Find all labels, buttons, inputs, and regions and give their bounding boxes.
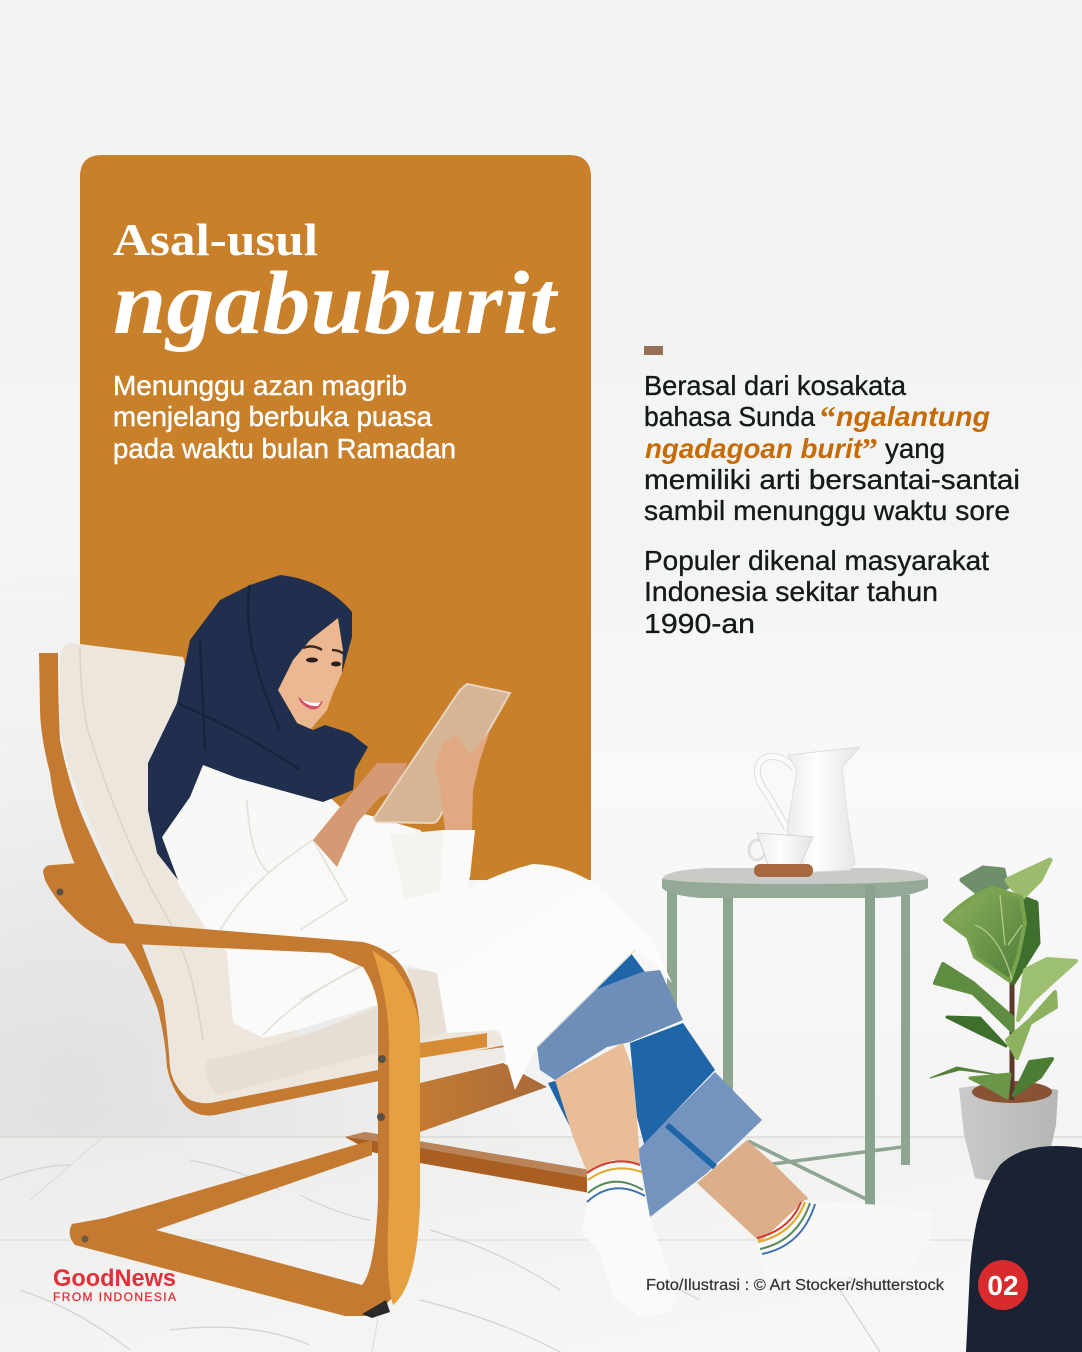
text block: popularity: Populer dikenal masyarakat: [644, 545, 989, 576]
accent marker: [644, 346, 663, 355]
illustration: arms and tablet: [313, 684, 510, 900]
text block: origin of the word: ngalantung: [836, 401, 990, 432]
illustration: dark foreground shape: [966, 1146, 1082, 1352]
text block: origin of the word: sambil menunggu waktu sore: [644, 495, 1010, 526]
illustration: face: [278, 618, 345, 730]
illustration: person jeans: [537, 952, 762, 1217]
text block: origin of the word: memiliki arti bersantai-santai: [644, 464, 1020, 495]
illustration: person far leg and sock: [697, 1140, 932, 1280]
text block: popularity: [644, 545, 989, 639]
page number badge: [978, 1260, 1028, 1310]
chair foot: [362, 1300, 390, 1318]
panel: orange title card: [80, 155, 591, 880]
text block: popularity: Indonesia sekitar tahun: [644, 576, 938, 607]
illustration: person robe: [162, 765, 672, 1090]
text block: origin of the word: Berasal dari kosakata: [644, 370, 906, 401]
photo credit: Foto/Ilustrasi : © Art Stocker/shutterstock: [646, 1277, 944, 1294]
subtitle text block: pada waktu bulan Ramadan: [113, 433, 456, 464]
illustration: side table: [662, 868, 928, 1206]
subtitle text block: menjelang berbuka puasa: [113, 401, 432, 432]
title: Asal-usul: Asal-usul: [113, 215, 318, 265]
illustration: chair cushion: [60, 643, 505, 1103]
subtitle text block: [113, 370, 456, 464]
page number badge: 02: [987, 1270, 1019, 1301]
logo: GoodNews from Indonesia: FROM INDONESIA: [53, 1290, 176, 1304]
background: marble floor: [0, 1137, 1082, 1352]
logo: GoodNews from Indonesia: GoodNews: [53, 1265, 176, 1292]
text block: popularity: 1990-an: [644, 608, 755, 639]
subtitle text block: Menunggu azan magrib: [113, 370, 407, 401]
text block: origin of the word: bahasa Sunda: [644, 401, 815, 432]
text block: origin of the word: ”: [862, 431, 878, 467]
text block: origin of the word: yang: [885, 433, 945, 464]
text block: origin of the word: “: [820, 399, 836, 435]
illustration: chair armrest and base: [43, 863, 420, 1316]
illustration: pitcher and cup: [749, 747, 860, 877]
text block: origin of the word: ngadagoan burit: [645, 433, 864, 464]
illustration: chair back frame: [39, 653, 505, 1116]
title: ngabuburit: ngabuburit: [113, 254, 559, 353]
illustration: person near leg and sock: [555, 1043, 677, 1317]
logo: GoodNews from Indonesia: [53, 1265, 176, 1304]
illustration: chair rear bar and under seat: [345, 1063, 590, 1193]
illustration: navy hijab: [148, 575, 368, 880]
text block: origin of the word: [644, 370, 1020, 526]
illustration: fiddle leaf plant in pot: [930, 860, 1076, 1181]
